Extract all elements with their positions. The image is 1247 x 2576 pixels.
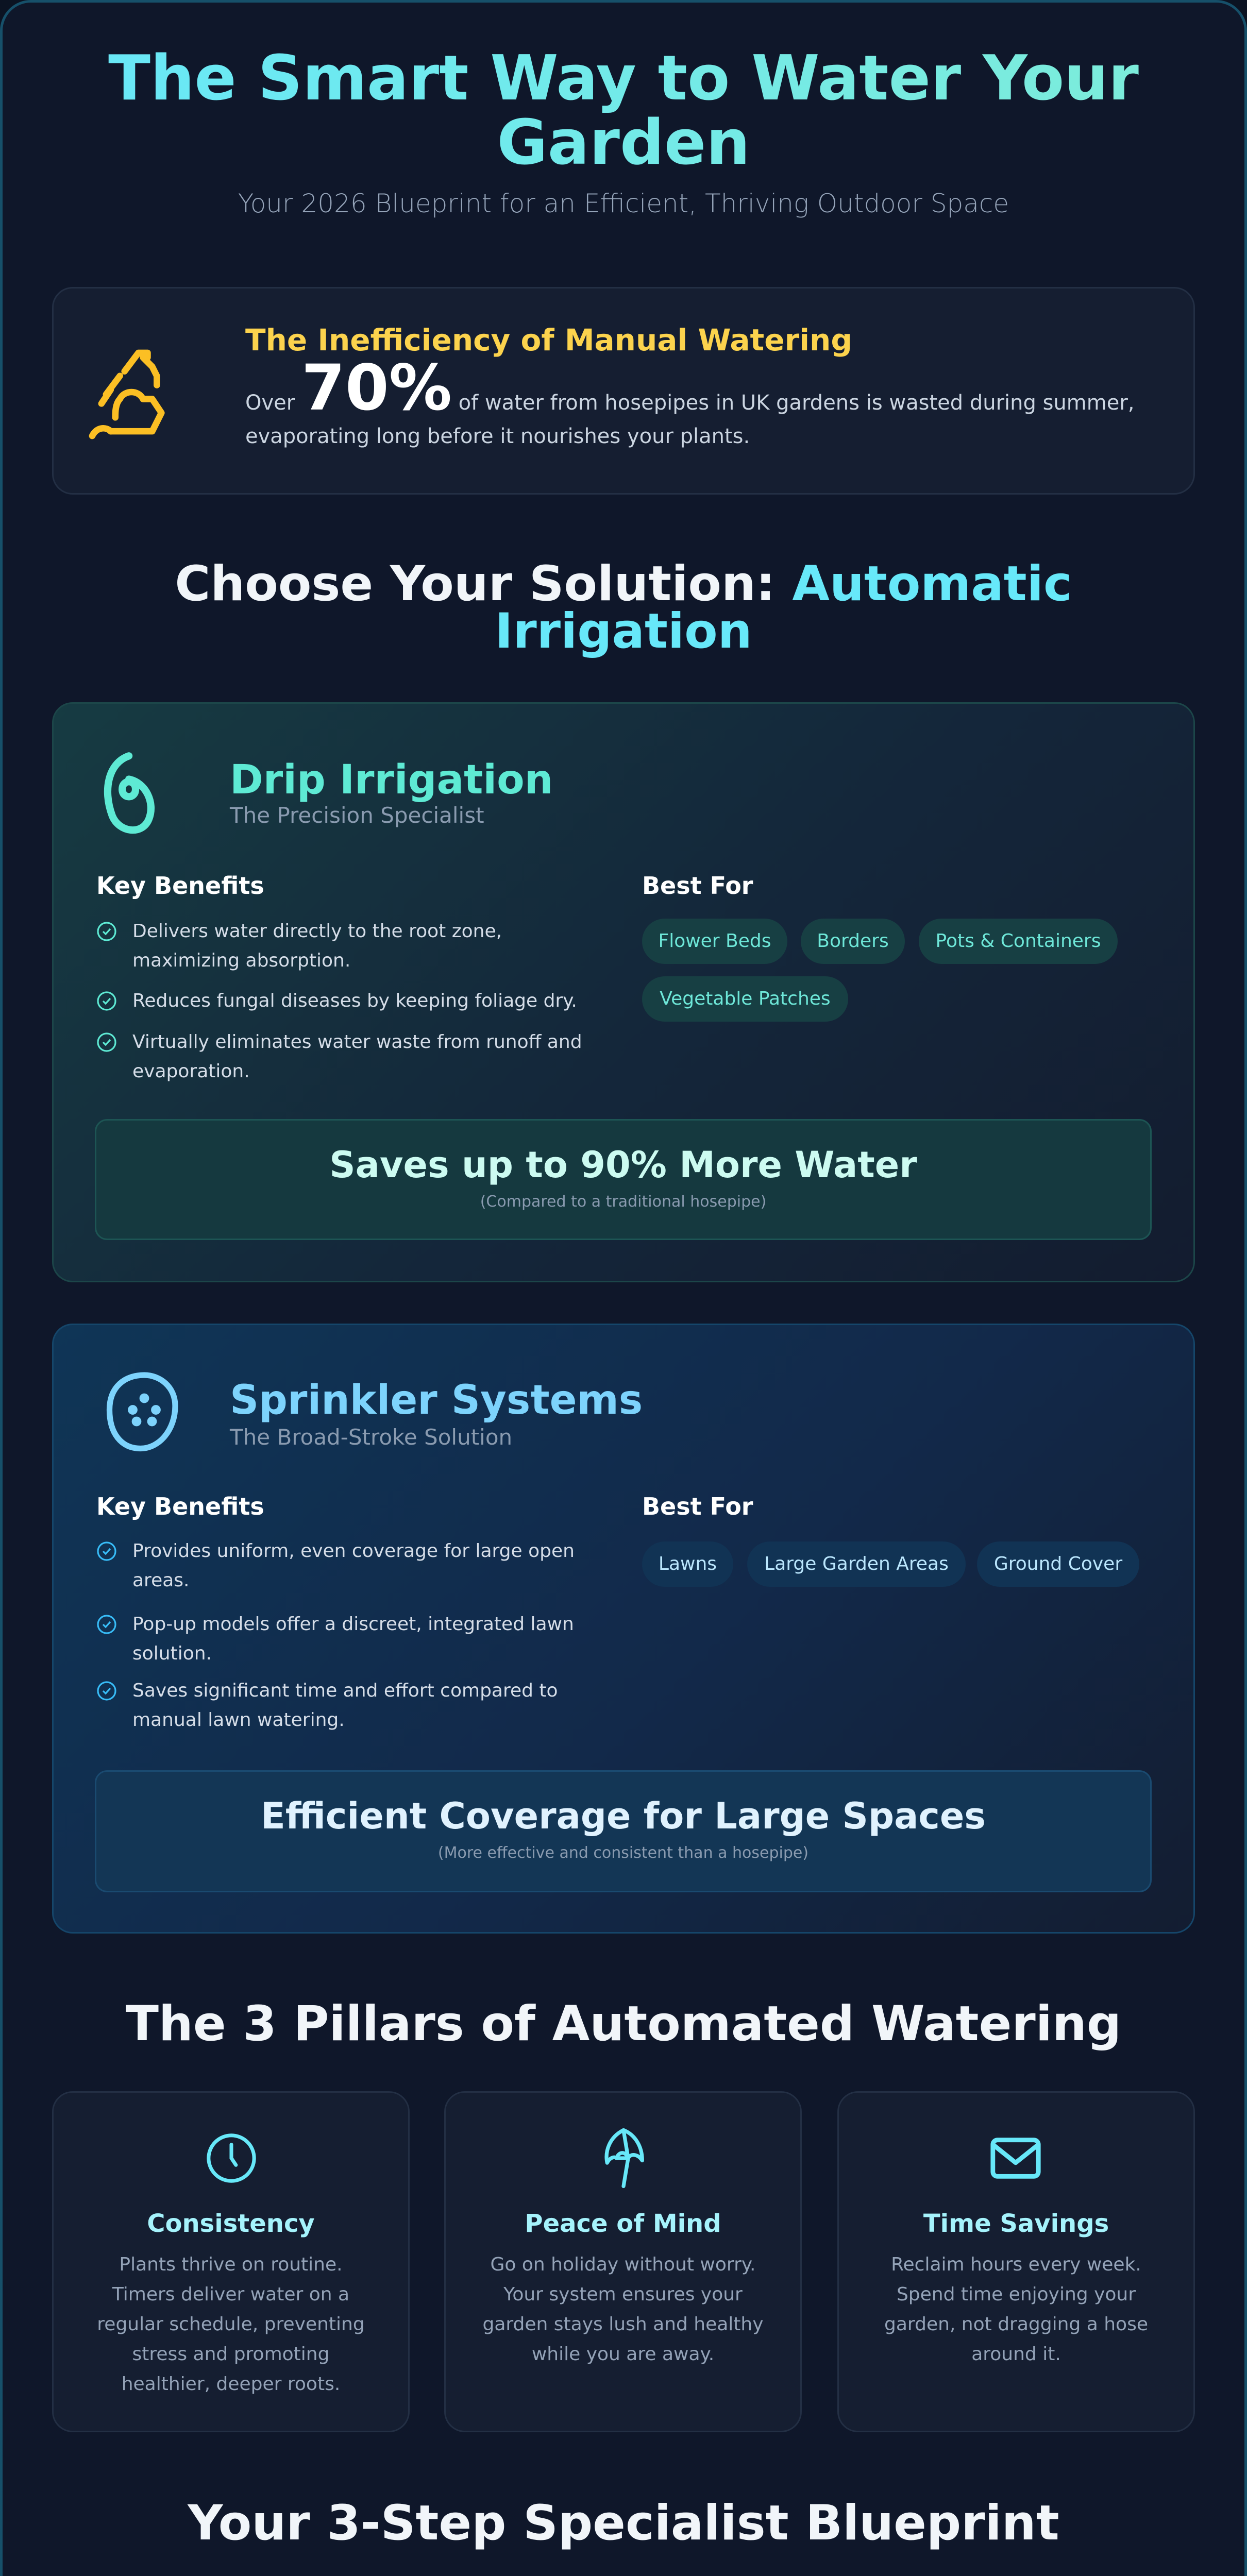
key benefits: Key Benefits xyxy=(96,872,264,900)
key benefits: evaporation. xyxy=(132,1061,250,1082)
body xyxy=(97,2254,365,2395)
heading: choose your solution: Irrigation xyxy=(495,603,752,659)
key benefits xyxy=(96,1493,575,1731)
body: around it. xyxy=(971,2344,1061,2365)
icon: sprinkler xyxy=(106,1372,178,1452)
body xyxy=(884,2254,1148,2365)
best for tags: Ground Cover xyxy=(994,1553,1122,1574)
callout: saves water: Saves up to 90% More Water xyxy=(329,1144,917,1186)
title: Drip Irrigation xyxy=(230,757,553,803)
callout: coverage: Efficient Coverage for Large Spaces xyxy=(261,1795,986,1837)
key benefits xyxy=(96,872,582,1082)
icon: envelope xyxy=(990,2138,1041,2179)
key benefits: Provides uniform, even coverage for large open xyxy=(132,1540,575,1562)
key benefits: areas. xyxy=(132,1570,189,1591)
body: healthier, deeper roots. xyxy=(122,2374,340,2395)
body: Reclaim hours every week. xyxy=(891,2254,1141,2275)
title: Peace of Mind xyxy=(525,2209,721,2238)
icon: hose xyxy=(89,349,165,439)
best for tags: Pots & Containers xyxy=(936,930,1101,952)
best for tags: Flower Beds xyxy=(658,930,771,952)
body: while you are away. xyxy=(532,2344,714,2365)
title: Consistency xyxy=(147,2209,315,2238)
stat text: Over 70% of water from hosepipes in UK gardens is wasted during summer, xyxy=(245,351,1134,425)
key benefits: solution. xyxy=(132,1643,212,1664)
title xyxy=(0,46,1247,175)
panel: inefficiency of manual watering xyxy=(52,287,1195,495)
heading: choose your solution xyxy=(175,556,1072,659)
icon: drip xyxy=(104,752,155,834)
body: regular schedule, preventing xyxy=(97,2314,365,2335)
subtitle: The Broad-Stroke Solution xyxy=(230,1425,512,1450)
stat text: evaporating long before it nourishes your plants. xyxy=(245,425,750,448)
key benefits: Key Benefits xyxy=(96,1493,264,1520)
key benefits: manual lawn watering. xyxy=(132,1709,345,1731)
title: The Smart Way to Water Your xyxy=(108,43,1139,114)
panel: time savings xyxy=(837,2091,1195,2432)
panel: consistency xyxy=(52,2091,410,2432)
best for tags: Best For xyxy=(642,1493,753,1520)
callout: saves water: (Compared to a traditional hosepipe) xyxy=(480,1193,766,1211)
body: Your system ensures your xyxy=(503,2284,743,2305)
callout: coverage: (More effective and consistent than a hosepipe) xyxy=(438,1844,808,1862)
best for tags xyxy=(642,1493,1139,1587)
subtitle: The Precision Specialist xyxy=(230,803,484,828)
subtitle: Your 2026 Blueprint for an Efficient, Thriving Outdoor Space xyxy=(238,189,1009,218)
body: Plants thrive on routine. xyxy=(119,2254,343,2275)
title: Garden xyxy=(497,107,750,179)
best for tags xyxy=(642,872,1118,1022)
key benefits: Virtually eliminates water waste from runoff and xyxy=(132,1031,582,1053)
heading: The Inefficiency of Manual Watering xyxy=(245,323,852,358)
icon: clock xyxy=(207,2133,256,2183)
body: garden stays lush and healthy xyxy=(482,2314,764,2335)
heading: 3-step blueprint: Your 3-Step Specialist Blueprint xyxy=(188,2495,1059,2551)
title: Time Savings xyxy=(923,2209,1109,2238)
key benefits: Reduces fungal diseases by keeping foliage dry. xyxy=(132,990,577,1011)
callout: coverage xyxy=(95,1770,1152,1892)
body xyxy=(482,2254,764,2365)
best for tags: Vegetable Patches xyxy=(660,988,831,1009)
key benefits: Saves significant time and effort compared to xyxy=(132,1680,558,1701)
heading: choose your solution: Choose Your Solution: Automatic xyxy=(175,556,1072,612)
key benefits: Delivers water directly to the root zone, xyxy=(132,921,502,942)
body: garden, not dragging a hose xyxy=(884,2314,1148,2335)
best for tags: Best For xyxy=(642,872,753,900)
body: Spend time enjoying your xyxy=(897,2284,1136,2305)
body: stress and promoting xyxy=(132,2344,329,2365)
body: Go on holiday without worry. xyxy=(491,2254,755,2275)
key benefits: maximizing absorption. xyxy=(132,950,350,971)
key benefits: Pop-up models offer a discreet, integrated lawn xyxy=(132,1614,574,1635)
best for tags: Lawns xyxy=(659,1553,717,1574)
callout: saves water xyxy=(95,1119,1152,1240)
panel: sprinkler systems xyxy=(52,1324,1195,1934)
icon: umbrella xyxy=(604,2128,644,2189)
panel: peace of mind xyxy=(444,2091,802,2432)
panel: drip irrigation xyxy=(52,702,1195,1282)
title: Sprinkler Systems xyxy=(230,1377,643,1423)
heading: 3 pillars: The 3 Pillars of Automated Watering xyxy=(126,1996,1121,2052)
best for tags: Borders xyxy=(817,930,889,952)
body: Timers deliver water on a xyxy=(112,2284,349,2305)
best for tags: Large Garden Areas xyxy=(764,1553,949,1574)
